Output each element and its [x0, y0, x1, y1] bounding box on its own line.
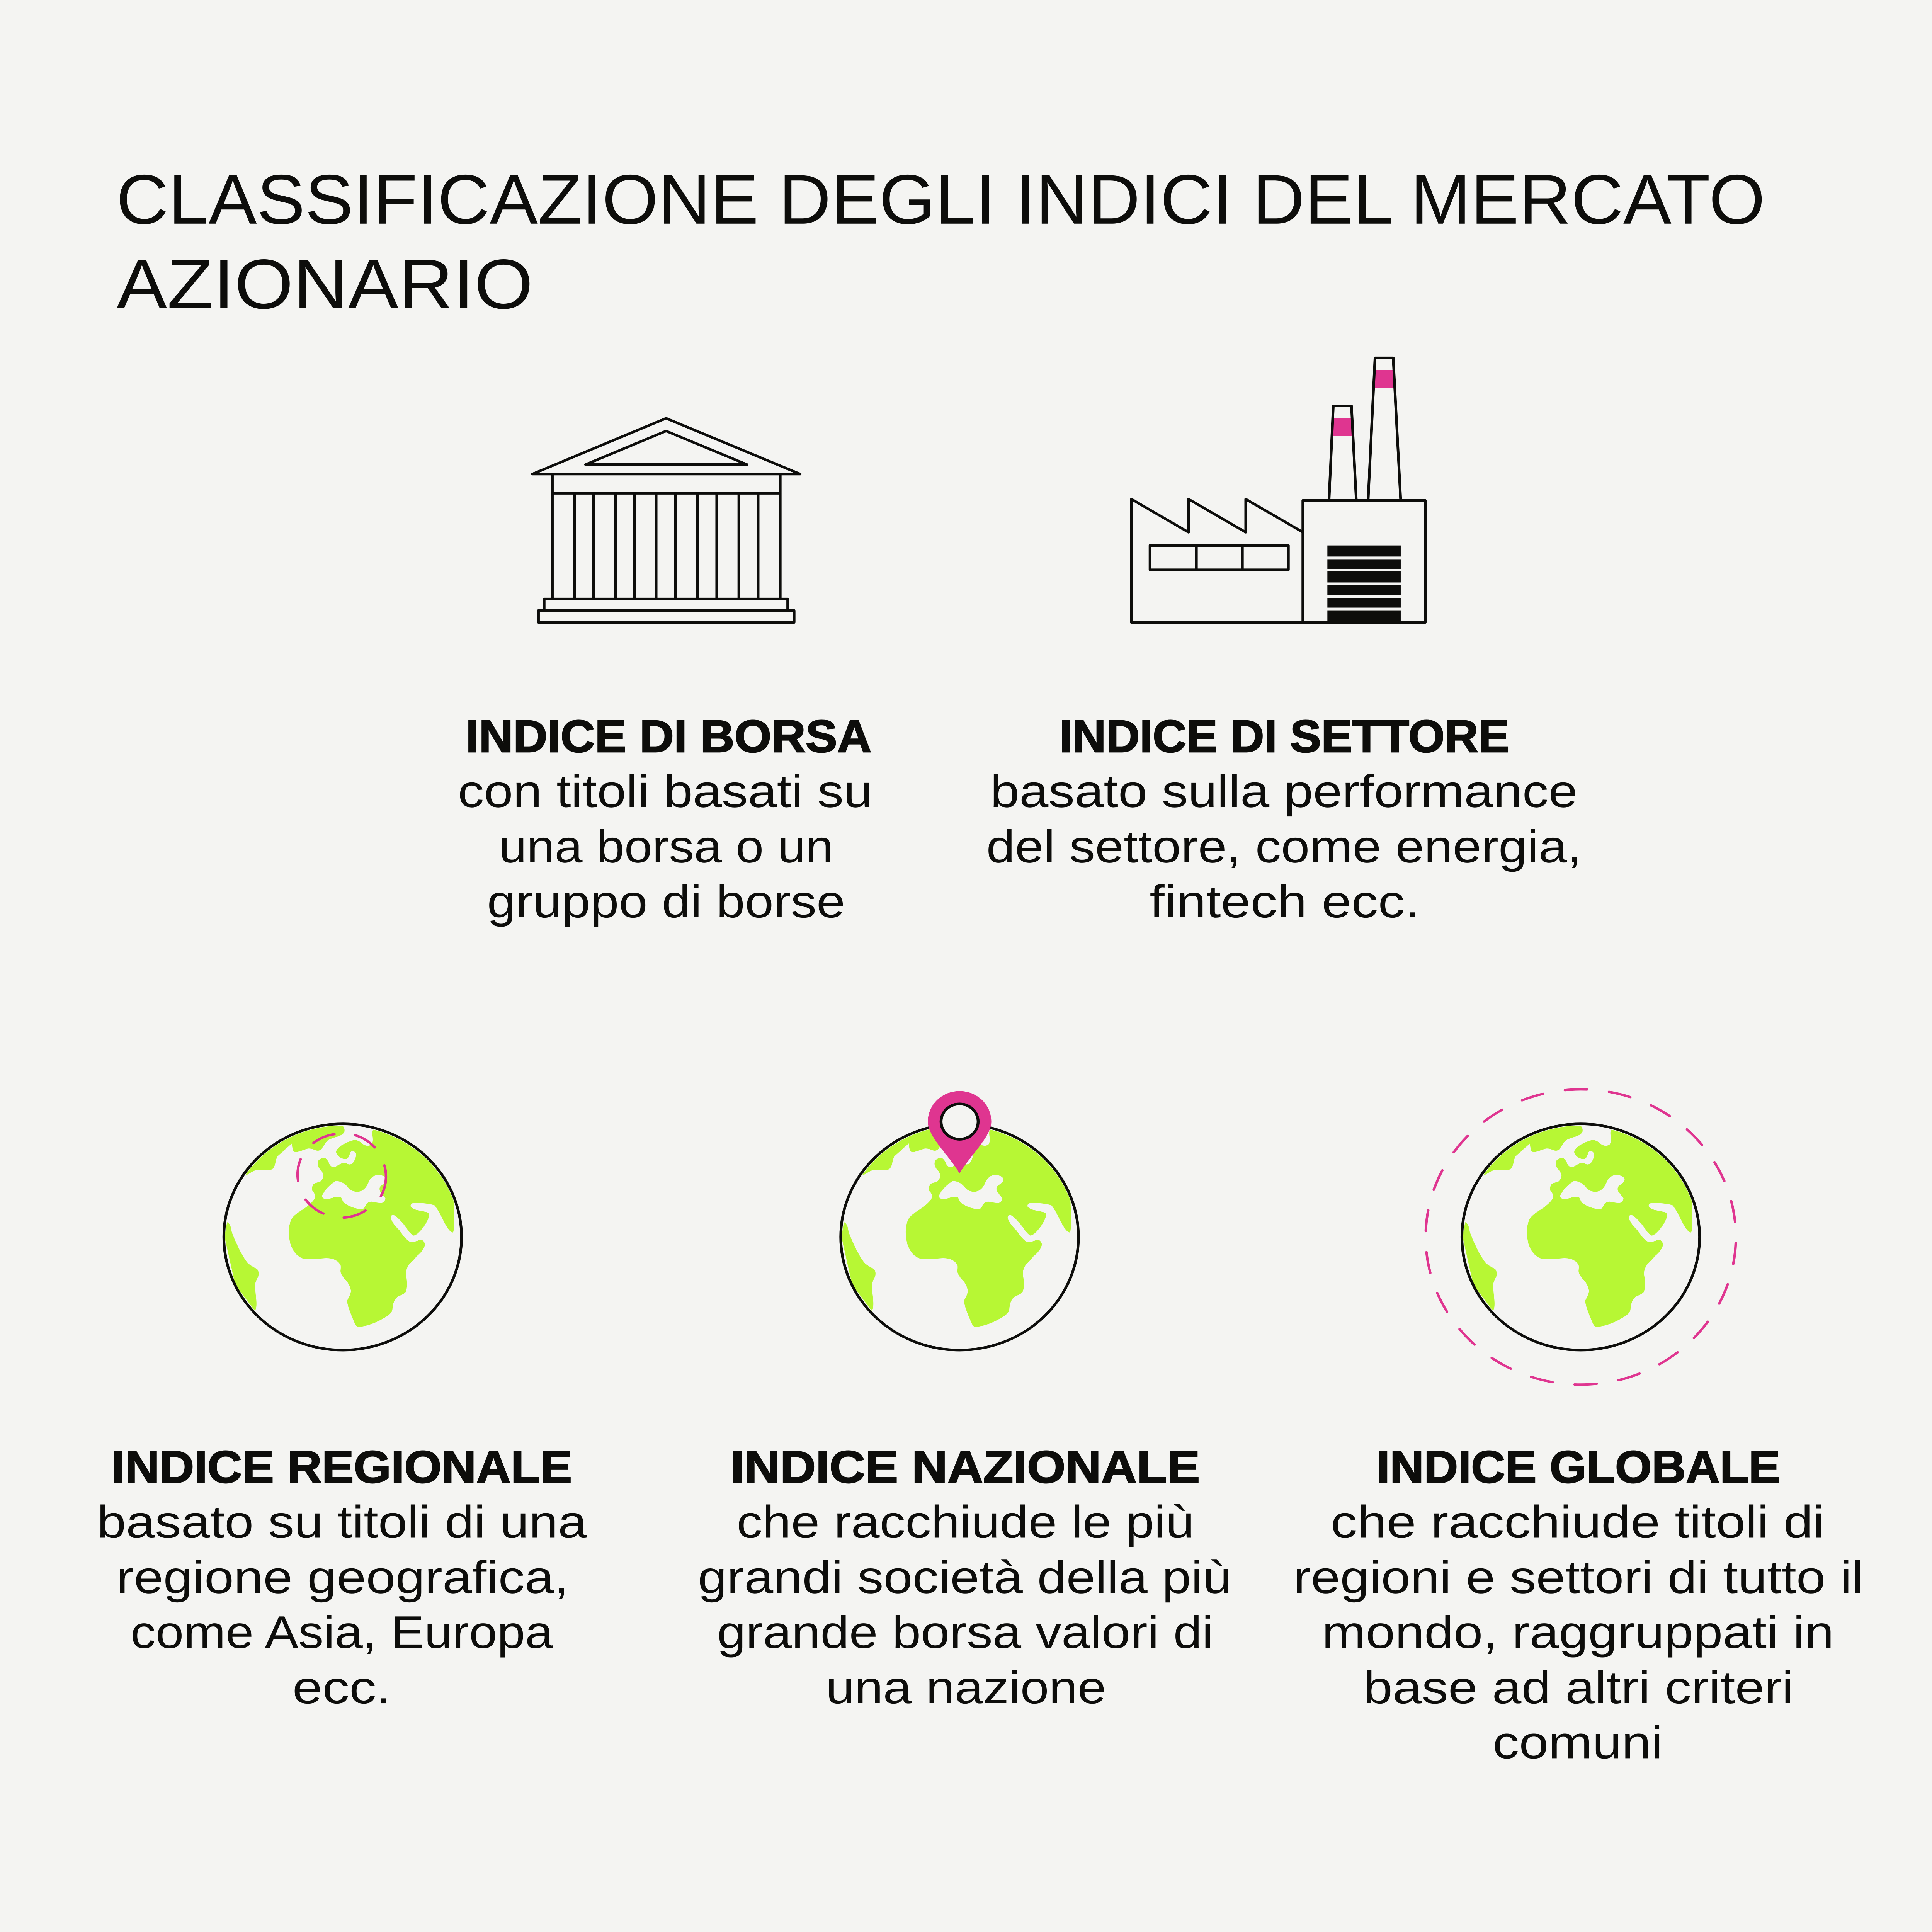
panel: indice globale: [1293, 1089, 1864, 1768]
text block: nazionale description: [698, 1496, 1232, 1713]
heading: indice regionale: INDICE REGIONALE: [112, 1442, 572, 1493]
title: AZIONARIO: [117, 245, 533, 323]
text block: regionale description: [97, 1496, 587, 1713]
title: [116, 160, 1765, 323]
text block: regionale description: basato su titoli di una: [97, 1496, 587, 1548]
text block: globale description: [1293, 1496, 1864, 1768]
text block: regionale description: ecc.: [293, 1662, 391, 1713]
icon: globe with dashed ring: [1426, 1089, 1736, 1384]
text block: borsa description: [458, 765, 872, 927]
text block: nazionale description: grandi società della più: [698, 1551, 1232, 1603]
heading: indice di borsa: INDICE DI BORSA: [466, 711, 871, 762]
heading: indice di settore: INDICE DI SETTORE: [1060, 711, 1509, 762]
panel: indice di borsa: [458, 418, 872, 927]
panel: indice regionale: [97, 1124, 587, 1713]
text block: borsa description: con titoli basati su: [458, 765, 872, 817]
text block: globale description: che racchiude titoli di: [1331, 1496, 1825, 1548]
heading: indice globale: INDICE GLOBALE: [1377, 1442, 1780, 1493]
panel: indice di settore: [986, 358, 1582, 927]
text block: globale description: comuni: [1493, 1717, 1663, 1768]
icon: globe with location pin: [841, 1091, 1078, 1350]
text block: nazionale description: che racchiude le più: [737, 1496, 1194, 1548]
title: CLASSIFICAZIONE DEGLI INDICI DEL MERCATO: [116, 160, 1765, 238]
text block: globale description: mondo, raggruppati in: [1322, 1607, 1834, 1658]
text block: borsa description: una borsa o un: [499, 821, 833, 872]
text block: nazionale description: una nazione: [826, 1662, 1106, 1713]
heading: indice nazionale: INDICE NAZIONALE: [731, 1442, 1200, 1493]
text block: regionale description: regione geografica,: [116, 1551, 569, 1603]
text block: globale description: base ad altri criteri: [1363, 1662, 1794, 1713]
text block: settore description: fintech ecc.: [1150, 876, 1420, 927]
icon: stock exchange building: [532, 418, 800, 622]
text block: nazionale description: grande borsa valori di: [717, 1607, 1213, 1658]
text block: settore description: [986, 765, 1582, 927]
text block: regionale description: come Asia, Europa: [131, 1607, 553, 1658]
text block: borsa description: gruppo di borse: [487, 876, 845, 927]
text block: settore description: del settore, come energia,: [986, 821, 1582, 872]
panel: indice nazionale: [698, 1091, 1232, 1713]
text block: globale description: regioni e settori di tutto il: [1293, 1551, 1864, 1603]
icon: globe with regional dashed ring: [224, 1124, 461, 1350]
text block: settore description: basato sulla performance: [990, 765, 1578, 817]
icon: factory: [1131, 358, 1425, 622]
